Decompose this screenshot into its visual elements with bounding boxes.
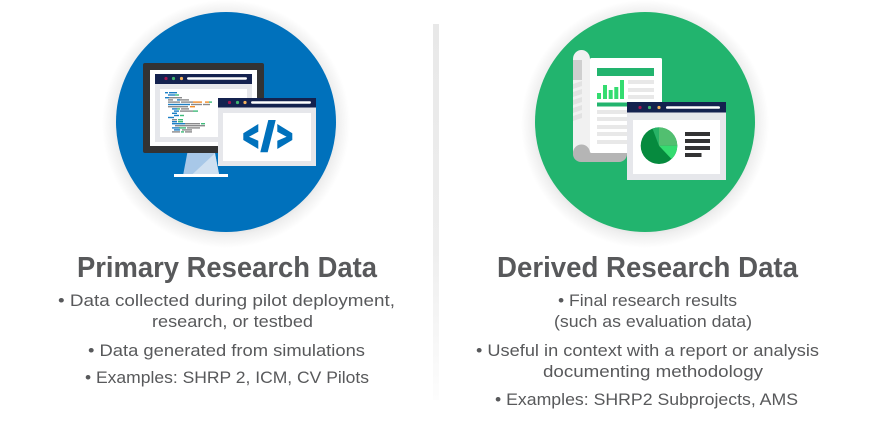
text block: derived bullets: (such as evaluation data)	[554, 313, 752, 331]
text block: derived bullets: • Examples: SHRP2 Subprojects, AMS	[495, 391, 798, 409]
icon: desktop monitor with code	[143, 63, 264, 177]
text block: derived bullets: documenting methodology	[543, 363, 764, 381]
icon: blue circle	[102, 0, 350, 248]
bar chart	[597, 80, 624, 99]
text block: derived bullets: • Final research results	[558, 292, 737, 310]
text block: primary bullets: research, or testbed	[152, 313, 313, 331]
divider	[433, 24, 439, 400]
heading: primary research data: Primary Research Data	[77, 252, 378, 284]
icon: code window	[218, 98, 316, 166]
icon: report scroll	[573, 50, 662, 162]
icon: green circle	[521, 0, 769, 248]
text block: primary bullets	[58, 292, 395, 387]
panel: derived research data	[476, 0, 819, 409]
panel: primary research data	[58, 0, 395, 387]
code lines	[165, 92, 212, 133]
pie chart	[641, 127, 677, 164]
text block: derived bullets: • Useful in context with a report or analysis	[476, 342, 819, 360]
text block: derived bullets	[476, 292, 819, 409]
icon: pie chart window	[627, 102, 726, 180]
heading: derived research data: Derived Research Data	[497, 252, 799, 284]
text block: primary bullets: • Examples: SHRP 2, ICM, CV Pilots	[85, 369, 369, 387]
text block: primary bullets: • Data collected during pilot deployment,	[58, 292, 395, 310]
text block: primary bullets: • Data generated from simulations	[88, 342, 365, 360]
